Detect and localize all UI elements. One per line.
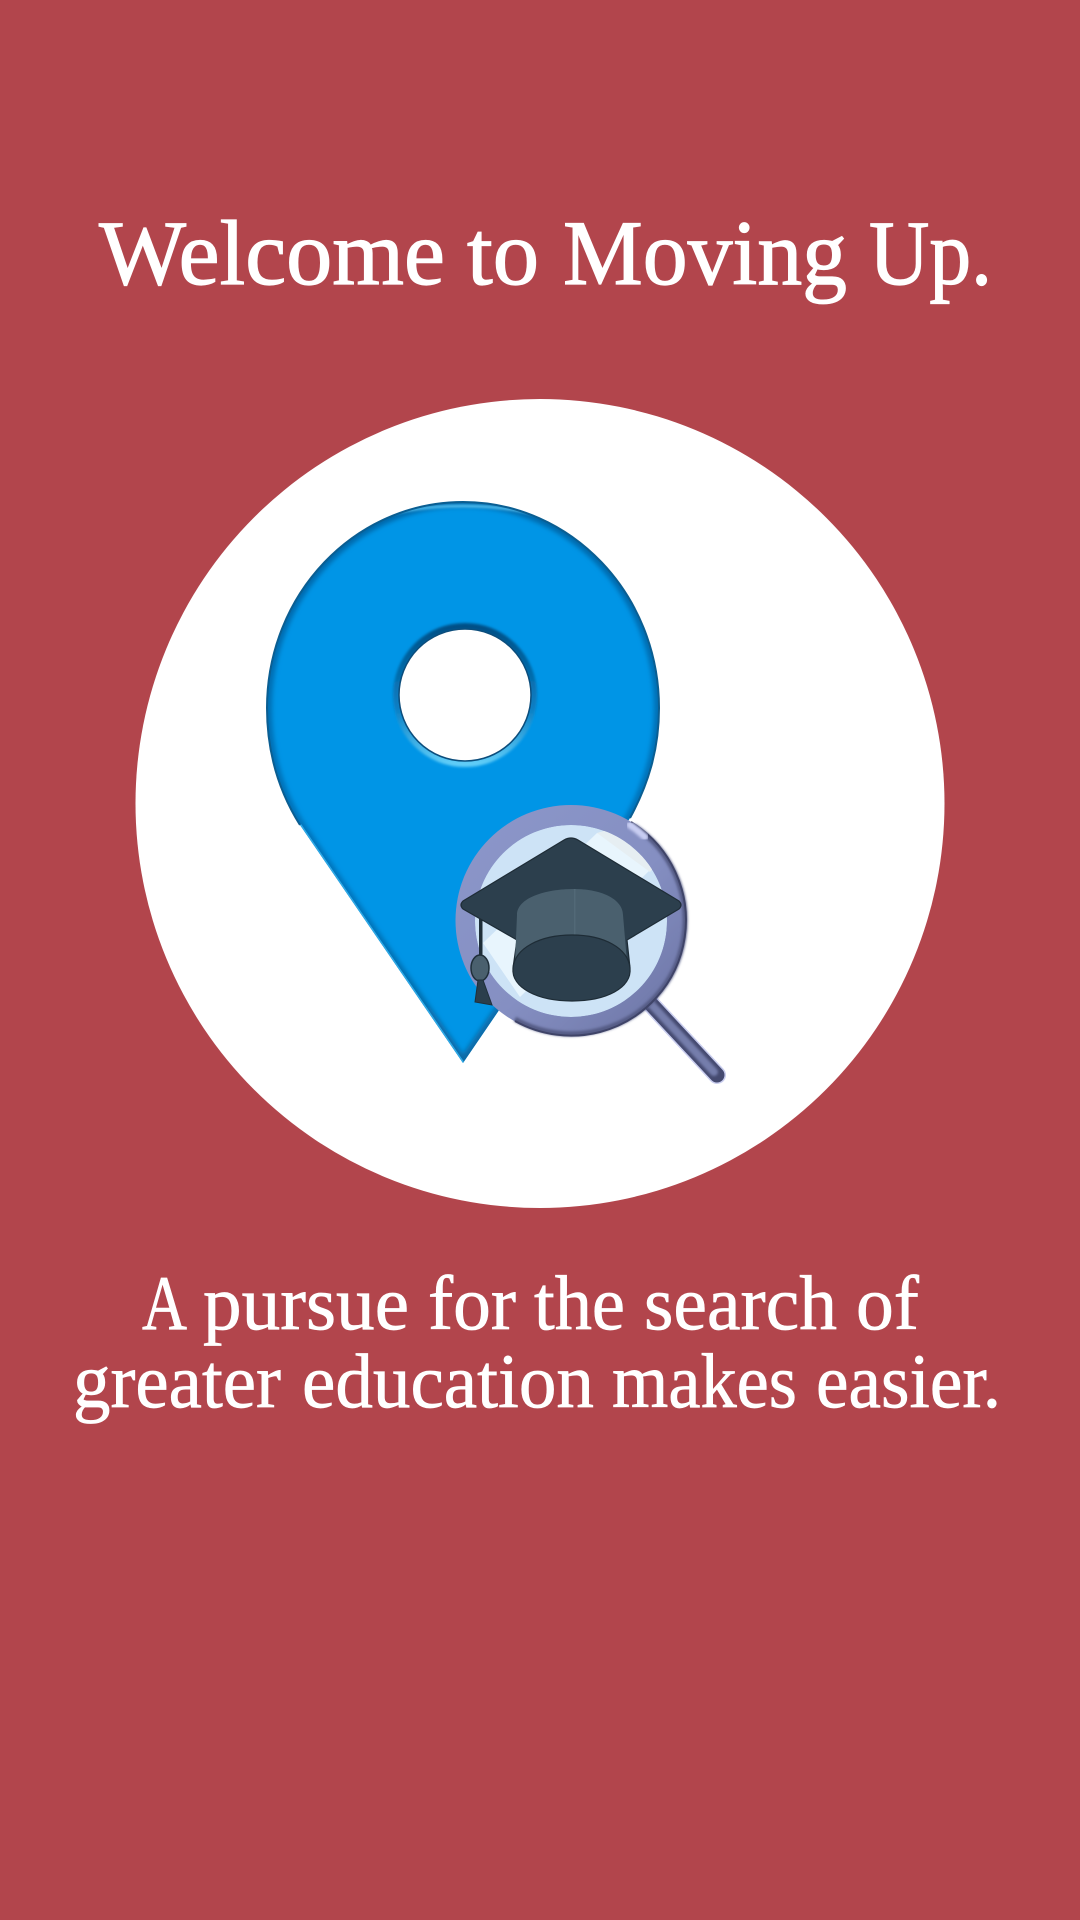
subtitle line 2: makes xyxy=(612,1338,797,1424)
subtitle line 2: education xyxy=(302,1338,594,1424)
icon: location pin with magnifier and graduation cap xyxy=(267,502,717,1075)
subtitle line 1: of xyxy=(856,1260,919,1346)
subtitle line 2 xyxy=(73,1338,1001,1424)
cap base xyxy=(513,935,630,1001)
title: Up. xyxy=(869,202,992,304)
cap board xyxy=(461,838,681,968)
subtitle line 1: the xyxy=(534,1260,625,1346)
subtitle xyxy=(73,1260,1001,1424)
tassel xyxy=(471,916,492,1005)
white circle panel xyxy=(136,399,944,1208)
magnifier ring xyxy=(456,805,686,1036)
title: Moving xyxy=(563,202,847,304)
icon: location pin xyxy=(267,502,659,1063)
magnifier handle xyxy=(650,1003,717,1075)
title xyxy=(99,202,992,304)
subtitle line 1: for xyxy=(428,1260,516,1346)
title: Welcome xyxy=(99,202,445,304)
subtitle line 2: easier. xyxy=(816,1338,1001,1424)
subtitle line 1: A xyxy=(142,1260,187,1346)
icon: graduation cap xyxy=(461,838,681,1005)
icon: magnifying glass xyxy=(456,805,717,1075)
subtitle line 1: pursue xyxy=(203,1260,409,1346)
subtitle line 2: greater xyxy=(73,1338,281,1424)
cap body xyxy=(515,889,627,962)
subtitle line 1: search xyxy=(644,1260,837,1346)
subtitle line 1 xyxy=(142,1260,919,1346)
magnifier lens xyxy=(475,820,667,1017)
title: to xyxy=(467,202,539,304)
